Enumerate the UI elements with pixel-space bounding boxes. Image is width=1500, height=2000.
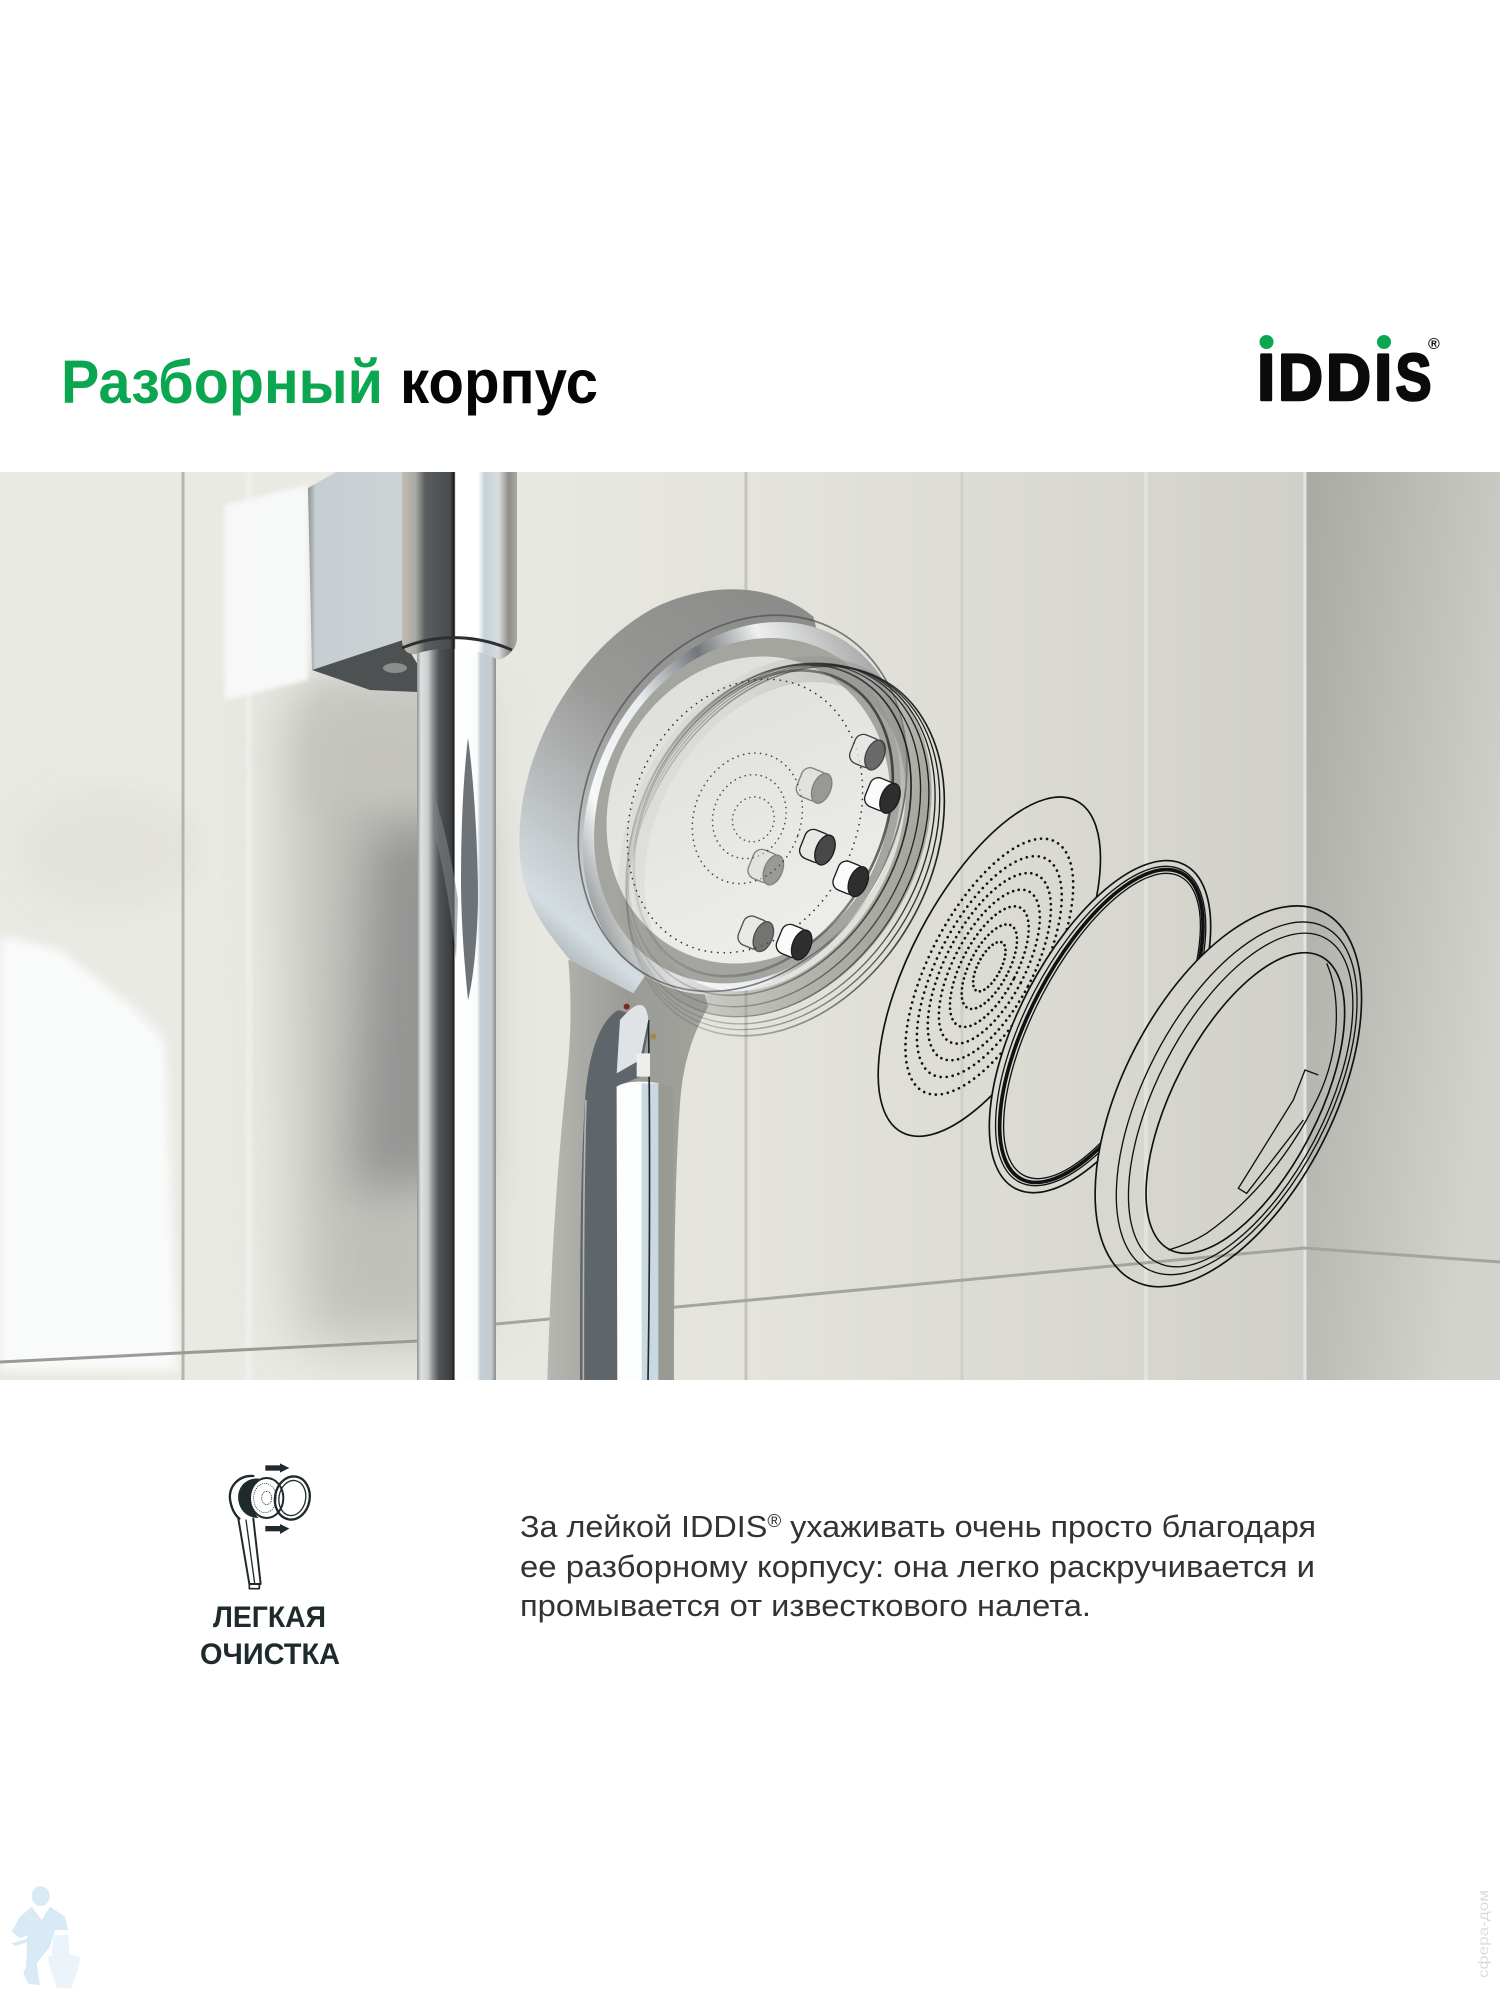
exploded retaining ring — [1094, 905, 1362, 1288]
icon: handle — [238, 1519, 261, 1584]
logo: IDDIS: ® — [1428, 336, 1440, 353]
wall bracket — [308, 472, 418, 692]
icon label: ЛЕГКАЯ — [213, 1601, 326, 1634]
icon label — [200, 1601, 340, 1671]
grey inner ring — [594, 638, 900, 984]
title: Разборный — [61, 348, 383, 416]
logo: IDDIS: I — [1374, 340, 1392, 414]
icon label: ОЧИСТКА — [200, 1638, 340, 1671]
logo: IDDIS: S — [1396, 340, 1432, 414]
logo: IDDIS: D — [1278, 340, 1323, 414]
icon: arrow bottom shaft — [265, 1526, 280, 1531]
face plate — [606, 656, 890, 964]
logo: IDDIS: I — [1257, 340, 1275, 414]
sliding rail — [417, 630, 496, 1380]
rail holder — [402, 472, 517, 660]
icon: arrow top — [280, 1463, 289, 1473]
logo: IDDIS — [1257, 335, 1440, 414]
exploded spray disc — [877, 796, 1102, 1138]
watermark: vertical site mark: сфера-дом — [1475, 1890, 1491, 1978]
photo: shower head on tiled wall — [0, 472, 1500, 1381]
description text: ухаживать очень просто благодаря — [781, 1509, 1316, 1544]
watermark: plumber — [12, 1886, 80, 1988]
description text — [520, 1509, 1316, 1623]
description text: промывается от известкового налета. — [520, 1588, 1091, 1623]
icon: spray face — [250, 1478, 283, 1518]
icon: detached ring — [271, 1474, 313, 1522]
description text: ее разборному корпусу: она легко раскручивается и — [520, 1549, 1315, 1584]
title — [61, 348, 598, 416]
title: корпус — [400, 348, 598, 416]
icon: head outline — [230, 1476, 253, 1519]
tiled wall — [0, 472, 1500, 1380]
logo: IDDIS: D — [1326, 340, 1371, 414]
transparent front ring — [620, 657, 946, 1037]
spray nozzles — [735, 731, 904, 963]
exploded gasket — [988, 860, 1212, 1194]
description text: ® — [767, 1511, 781, 1531]
chrome rim — [583, 622, 906, 994]
icon: dark crescent — [238, 1479, 259, 1518]
icon: arrow top shaft — [265, 1465, 280, 1471]
face dots — [626, 678, 864, 954]
shower handle — [547, 960, 708, 1381]
icon: handle ridge — [246, 1520, 255, 1583]
description text: За лейкой IDDIS — [520, 1509, 757, 1544]
icon: arrow bottom — [280, 1524, 289, 1534]
shower head — [519, 589, 946, 1037]
icon: easy cleaning — [230, 1463, 313, 1589]
icon: handle tip — [249, 1584, 259, 1589]
head body — [519, 589, 833, 993]
